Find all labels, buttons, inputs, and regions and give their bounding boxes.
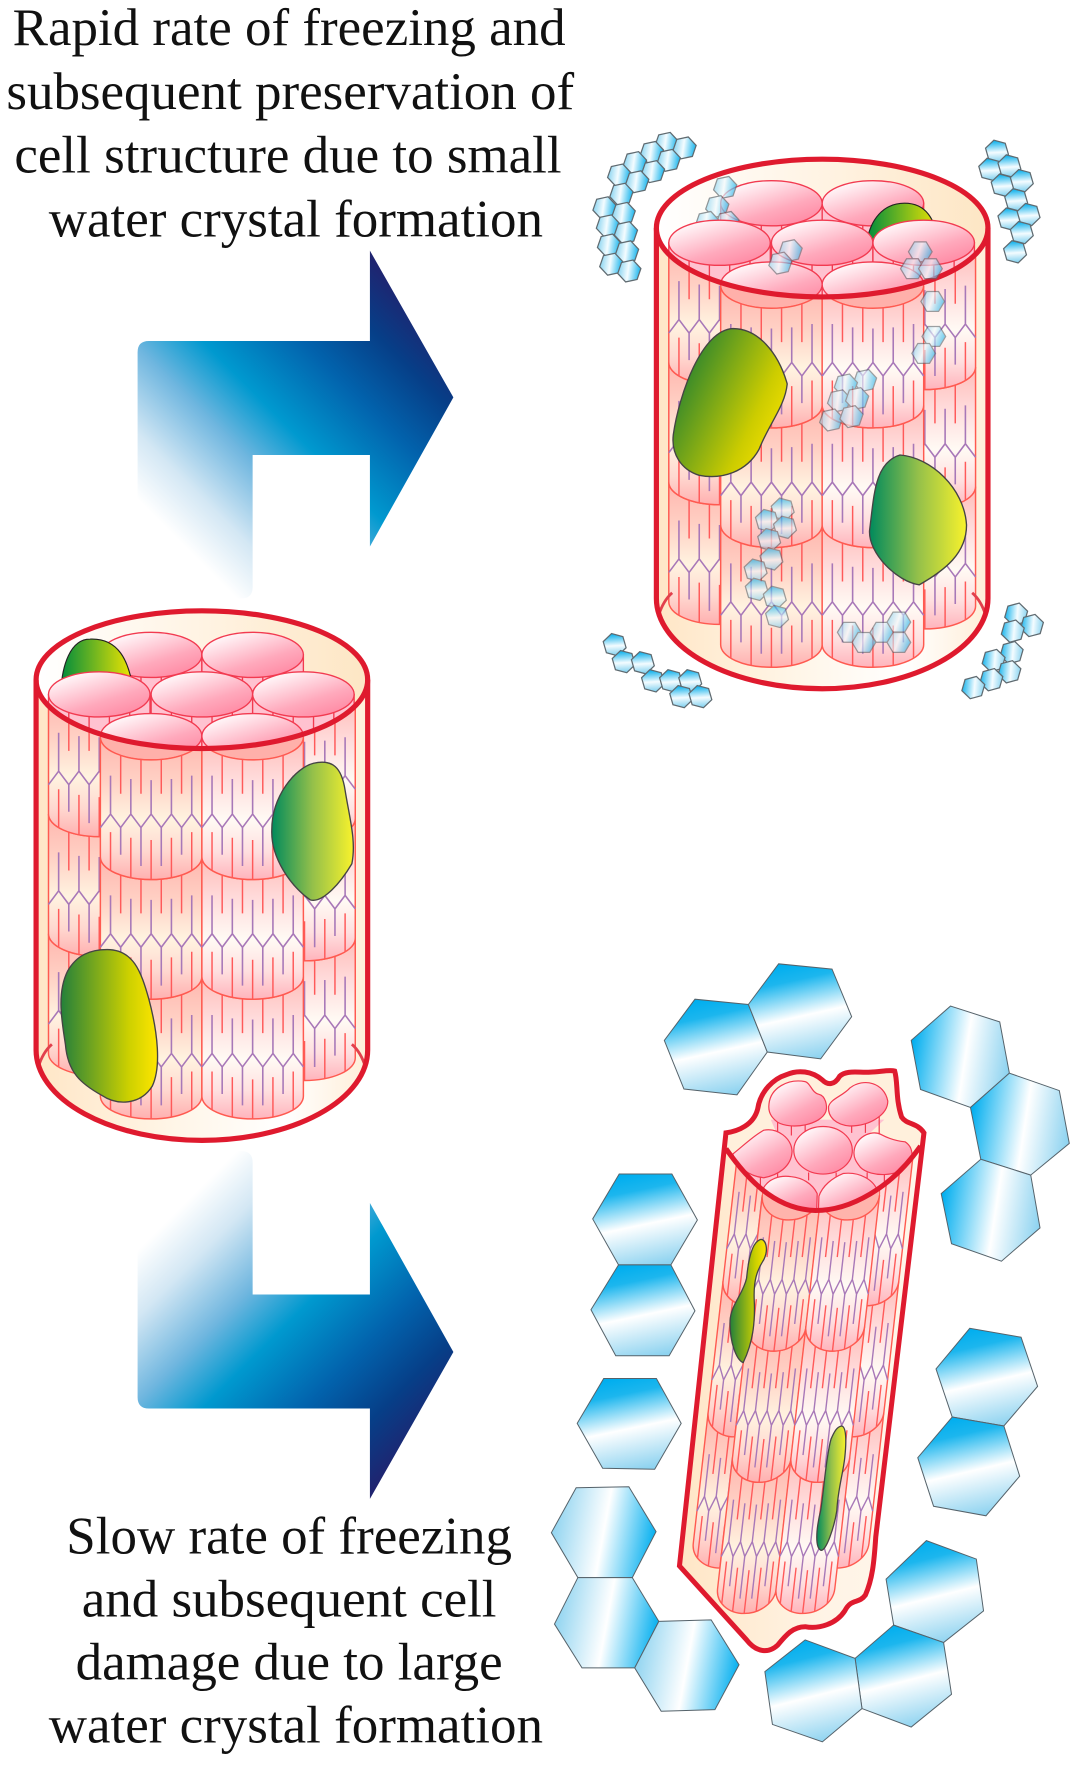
large ice crystals around damaged cell [551, 964, 1069, 1742]
nucleus: right [272, 762, 353, 900]
caption: slow freezing: and subsequent cell [82, 1571, 497, 1629]
heading: rapid freezing: Rapid rate of freezing and [13, 0, 566, 57]
damaged cell outline [679, 1071, 924, 1651]
caption: slow freezing: damage due to large [76, 1634, 503, 1692]
heading: rapid freezing: cell structure due to small [14, 127, 562, 185]
caption: slow freezing: Slow rate of freezing [66, 1508, 512, 1566]
small ice crystals: bottom left [601, 632, 714, 709]
small ice crystals: top right [976, 139, 1043, 264]
small ice crystals behind top fibres [693, 175, 741, 235]
fresh muscle fibre cylinder [36, 611, 368, 1140]
caption: slow freezing [49, 1508, 543, 1755]
small ice crystals inside cell [742, 238, 946, 652]
heading: rapid freezing: subsequent preservation of [6, 63, 574, 121]
arrow: up to rapid freezing [138, 251, 453, 598]
nucleus: behind top fibres [61, 639, 133, 691]
nucleus: large right [870, 455, 967, 585]
shrunken nucleus: lower [817, 1426, 846, 1550]
compressed fibres [690, 1150, 914, 1613]
heading: rapid freezing: water crystal formation [49, 190, 543, 248]
nucleus: large left [673, 329, 787, 477]
heading: rapid freezing [6, 0, 574, 248]
shrunken nucleus: upper [730, 1239, 766, 1363]
damaged cell top face [679, 1071, 924, 1651]
arrow: down to slow freezing [138, 1151, 453, 1499]
rapid-frozen cell cylinder with small ice crystals [656, 159, 988, 689]
small ice crystals: top left [591, 131, 698, 283]
small ice crystals: bottom right [959, 602, 1046, 700]
nucleus: lower left [61, 950, 158, 1102]
nucleus: behind top fibres [867, 203, 939, 239]
caption: slow freezing: water crystal formation [49, 1697, 543, 1755]
damaged cell cylinder [679, 1071, 924, 1651]
